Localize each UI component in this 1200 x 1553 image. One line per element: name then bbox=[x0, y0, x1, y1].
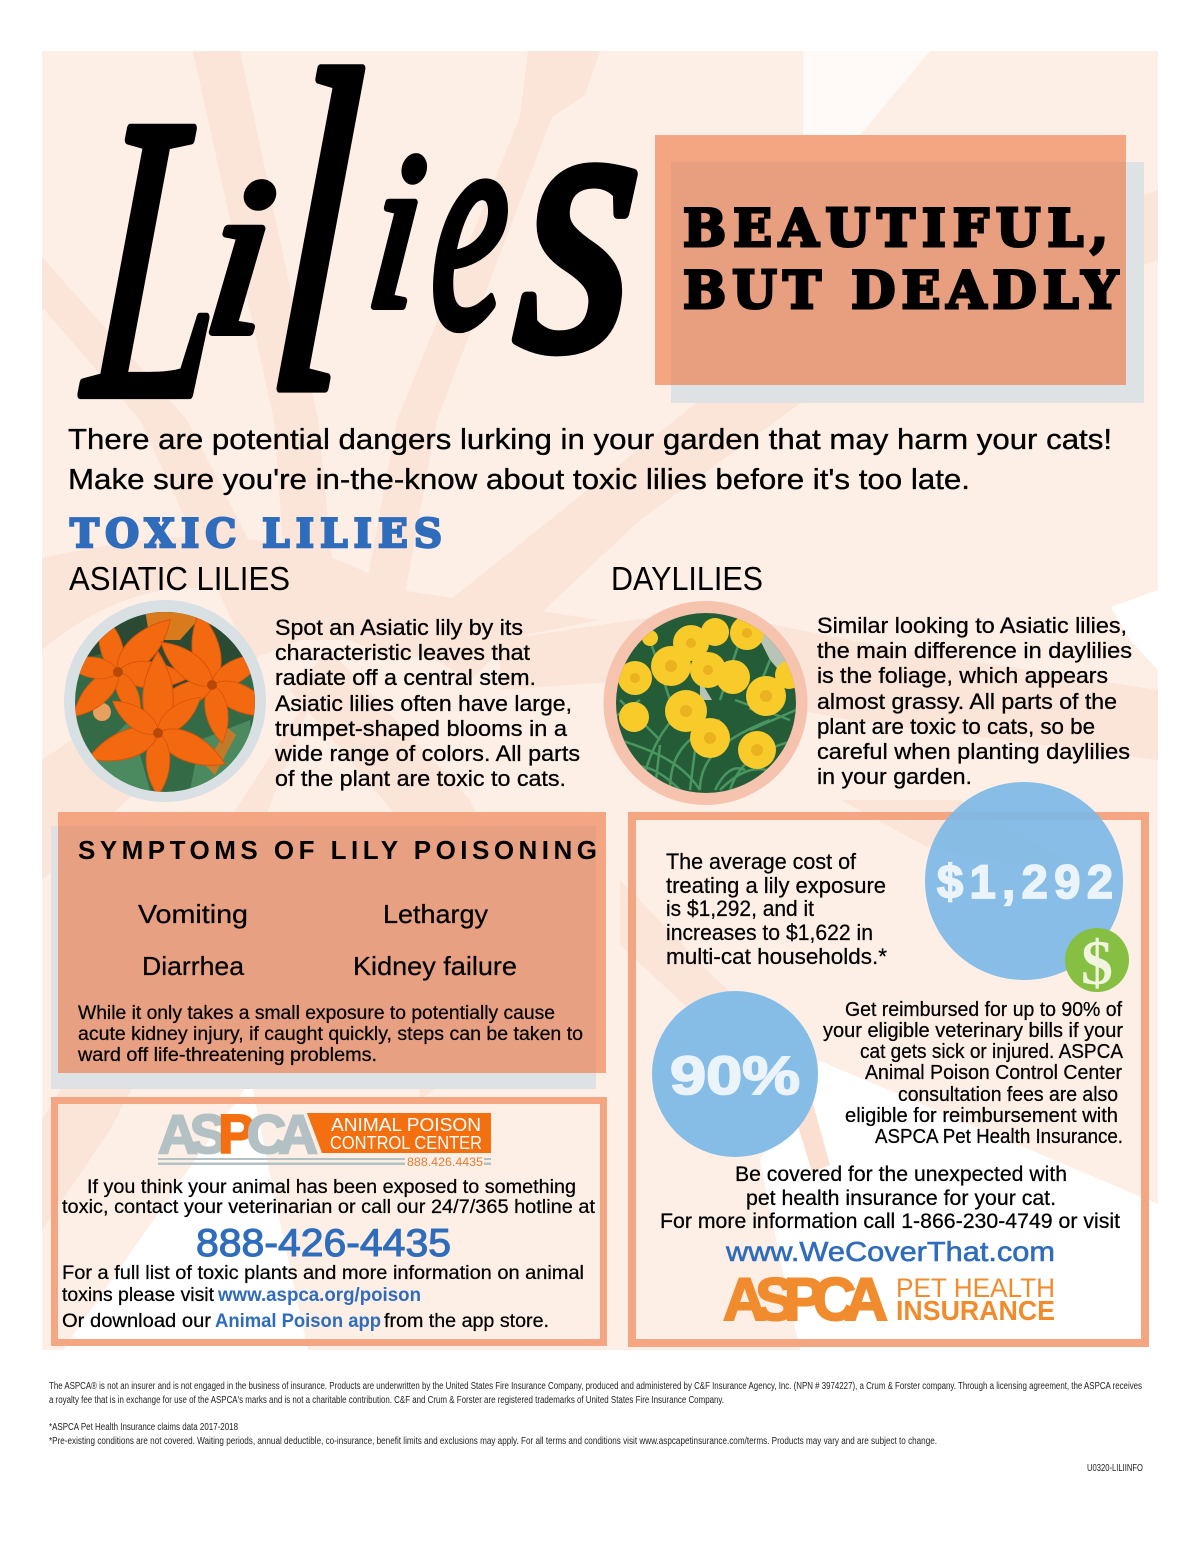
resources text: Animal Poison app bbox=[215, 1310, 381, 1332]
symptoms note bbox=[77, 1002, 583, 1066]
intro text: There are potential dangers lurking in your garden that may harm your cats! bbox=[68, 424, 1112, 456]
resources text: from the app store. bbox=[384, 1310, 549, 1332]
stat circle: $1,292: $1,292 bbox=[937, 855, 1113, 908]
footer code: U0320-LILIINFO bbox=[1087, 1463, 1143, 1474]
reimbursement text: eligible for reimbursement with bbox=[845, 1105, 1118, 1127]
symptoms heading: SYMPTOMS OF LILY POISONING bbox=[78, 835, 597, 865]
title script lettering bbox=[72, 0, 655, 488]
cost text: increases to $1,622 in bbox=[666, 920, 873, 945]
hotline text: toxic, contact your veterinarian or call our 24/7/365 hotline at bbox=[62, 1196, 596, 1218]
text: asiatic lilies description: radiate off a central stem. bbox=[275, 665, 536, 690]
cost text: treating a lily exposure bbox=[666, 873, 886, 898]
logo: ASPCA pet health insurance bbox=[723, 1266, 1055, 1333]
text: daylilies description: Similar looking to Asiatic lilies, bbox=[817, 613, 1127, 638]
resources text: www.aspca.org/poison bbox=[217, 1284, 421, 1306]
cost text bbox=[666, 849, 887, 969]
text: daylilies description: almost grassy. All parts of the bbox=[817, 689, 1117, 714]
text: asiatic lilies description: characteristic leaves that bbox=[275, 640, 530, 665]
subheading: daylilies: DAYLILIES bbox=[611, 560, 763, 597]
panel: insurance bbox=[632, 782, 1145, 1343]
intro text bbox=[68, 424, 1112, 496]
reimbursement text: consultation fees are also bbox=[898, 1084, 1118, 1106]
resources text: toxins please visit bbox=[62, 1284, 215, 1306]
text: asiatic lilies description bbox=[274, 615, 580, 791]
website link: www.WeCoverThat.com bbox=[725, 1236, 1055, 1267]
intro text: Make sure you're in-the-know about toxic lilies before it's too late. bbox=[68, 464, 970, 496]
reimbursement text: your eligible veterinary bills if your bbox=[823, 1020, 1123, 1042]
footer disclaimer: *ASPCA Pet Health Insurance claims data 2017-2018 bbox=[49, 1422, 238, 1433]
logo: ASPCA animal poison control center: 888.426.4435 bbox=[407, 1157, 483, 1169]
title script lettering: i bbox=[358, 107, 436, 356]
reimbursement text: Animal Poison Control Center bbox=[865, 1062, 1122, 1084]
subtitle text: BUT DEADLY bbox=[683, 261, 1119, 321]
title script lettering: i bbox=[195, 133, 286, 381]
logo: ASPCA pet health insurance: ASPCA bbox=[723, 1266, 888, 1333]
symptoms note: ward off life-threatening problems. bbox=[77, 1044, 377, 1066]
logo: ASPCA animal poison control center: CONTROL CENTER bbox=[330, 1133, 482, 1153]
text: daylilies description: plant are toxic to cats, so be bbox=[817, 714, 1095, 739]
stat circle: 90%: 90% bbox=[670, 1046, 800, 1106]
footer disclaimer bbox=[49, 1381, 1142, 1447]
footer disclaimer: a royalty fee that is in exchange for use of the ASPCA's marks and is not a charitable contribution. C&F and Crum & Forster are registered trademarks of United States Fire Insurance Company. bbox=[49, 1395, 724, 1406]
text: asiatic lilies description: trumpet-shaped blooms in a bbox=[275, 716, 568, 741]
text: daylilies description: in your garden. bbox=[817, 764, 972, 789]
resources text: Or download our bbox=[62, 1310, 212, 1332]
text: asiatic lilies description: of the plant are toxic to cats. bbox=[275, 766, 566, 791]
hotline text: If you think your animal has been exposed to something bbox=[87, 1176, 576, 1198]
icon: dollar badge bbox=[1065, 927, 1129, 998]
hotline number: 888-426-4435 bbox=[196, 1222, 451, 1265]
resources text bbox=[62, 1262, 584, 1332]
logo: ASPCA pet health insurance: PET HEALTH bbox=[896, 1273, 1055, 1303]
text: daylilies description bbox=[817, 613, 1132, 789]
symptoms note: acute kidney injury, if caught quickly, steps can be taken to bbox=[78, 1023, 583, 1045]
reimbursement text bbox=[823, 999, 1124, 1148]
reimbursement text: Get reimbursed for up to 90% of bbox=[845, 999, 1122, 1021]
cost text: multi-cat households.* bbox=[666, 944, 887, 969]
subtitle panel bbox=[655, 135, 1144, 403]
cost text: The average cost of bbox=[666, 849, 857, 874]
subtitle text: BEAUTIFUL, bbox=[683, 199, 1108, 259]
call to action text: Be covered for the unexpected with bbox=[735, 1163, 1067, 1186]
symptoms list: Diarrhea bbox=[142, 951, 245, 981]
hotline text bbox=[62, 1176, 596, 1218]
call to action text bbox=[660, 1163, 1120, 1233]
reimbursement text: cat gets sick or injured. ASPCA bbox=[860, 1041, 1124, 1063]
reimbursement text: ASPCA Pet Health Insurance. bbox=[875, 1126, 1123, 1148]
cost text: is $1,292, and it bbox=[666, 896, 814, 921]
photo: daylilies bbox=[604, 601, 808, 805]
symptoms list: Lethargy bbox=[383, 899, 488, 929]
text: daylilies description: careful when planting daylilies bbox=[817, 739, 1130, 764]
title script lettering: s bbox=[505, 9, 655, 430]
text: asiatic lilies description: wide range of colors. All parts bbox=[274, 741, 580, 766]
page background panel with petal pattern bbox=[42, 51, 1158, 1350]
footer disclaimer: *Pre-existing conditions are not covered. Waiting periods, annual deductible, co-insurance, benefit limits and exclusions may apply. For all terms and conditions visit www.aspcapetinsurance.com/terms. Products may vary and are subject to change. bbox=[49, 1436, 937, 1447]
call to action text: pet health insurance for your cat. bbox=[746, 1187, 1056, 1210]
photo: asiatic lilies bbox=[62, 600, 281, 802]
text: daylilies description: is the foliage, which appears bbox=[817, 663, 1108, 688]
stat circle: 90% bbox=[652, 991, 818, 1157]
text: asiatic lilies description: Spot an Asiatic lily by its bbox=[275, 615, 523, 640]
symptoms list bbox=[138, 899, 517, 981]
title script lettering: e bbox=[424, 59, 519, 391]
subtitle text bbox=[683, 199, 1119, 321]
subheading: asiatic lilies: ASIATIC LILIES bbox=[69, 560, 290, 597]
symptoms list: Kidney failure bbox=[353, 951, 517, 981]
call to action text: For more information call 1-866-230-4749 or visit bbox=[660, 1210, 1120, 1233]
panel: symptoms bbox=[51, 812, 606, 1089]
section heading: toxic lilies: TOXIC LILIES bbox=[70, 511, 442, 557]
logo: ASPCA pet health insurance: INSURANCE bbox=[896, 1295, 1055, 1326]
panel: poison control bbox=[54, 1100, 604, 1342]
symptoms note: While it only takes a small exposure to potentially cause bbox=[78, 1002, 555, 1024]
resources text: For a full list of toxic plants and more information on animal bbox=[62, 1262, 584, 1284]
logo: ASPCA animal poison control center: ASPCA bbox=[158, 1103, 318, 1165]
logo: ASPCA animal poison control center bbox=[158, 1103, 491, 1169]
stat circle: $1,292 bbox=[925, 782, 1123, 980]
symptoms list: Vomiting bbox=[138, 899, 248, 929]
logo: ASPCA animal poison control center: ANIMAL POISON bbox=[331, 1115, 481, 1135]
title script lettering: L bbox=[72, 35, 242, 482]
icon: dollar badge: $ bbox=[1081, 927, 1113, 998]
text: asiatic lilies description: Asiatic lilies often have large, bbox=[275, 691, 572, 716]
text: daylilies description: the main difference in daylilies bbox=[817, 638, 1132, 663]
